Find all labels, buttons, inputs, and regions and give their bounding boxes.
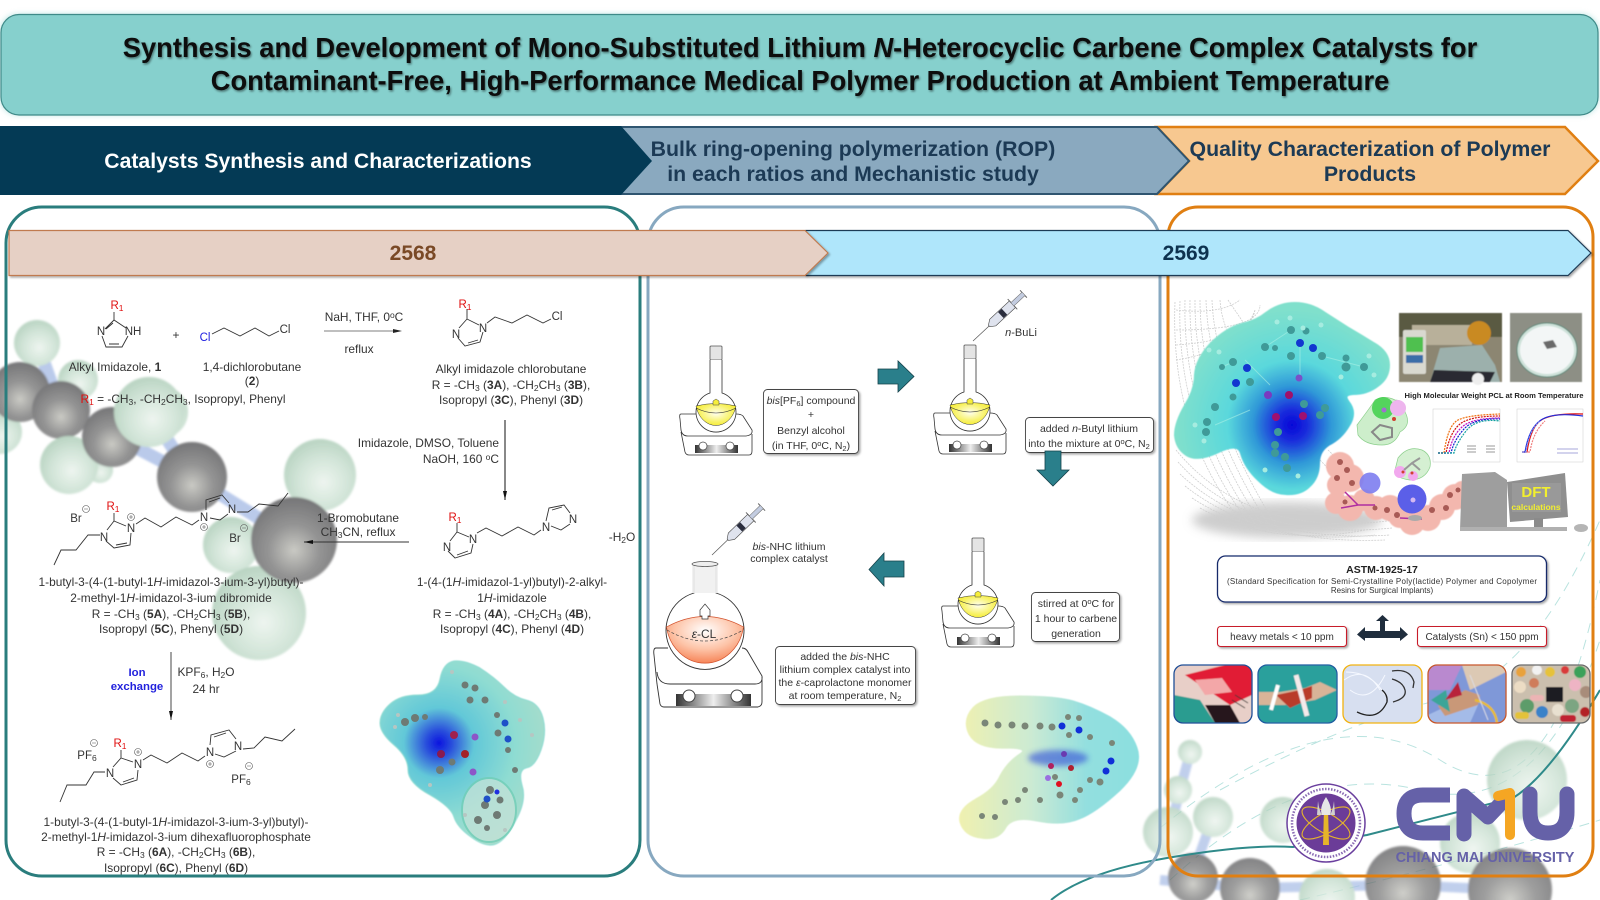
compound 3 caption: ( <box>561 378 568 392</box>
decorative teal swoosh line <box>1051 690 1600 900</box>
title banner <box>0 14 1599 115</box>
compound 4 caption: 1-(4-(1H-imidazol-1-yl)butyl)-2-alkyl- <box>417 575 607 589</box>
compound 5 caption: 1-butyl-3-(4-(1-butyl-1H-imidazol-3-ium-3-yl)butyl)- <box>39 575 304 589</box>
compound 5 caption: ( <box>140 607 147 621</box>
step 1 text box: (in THF, 0 <box>772 440 817 452</box>
compound 6 caption: CH <box>204 845 221 859</box>
reaction arrow 1: C <box>395 310 404 324</box>
structure: 4: N <box>542 522 550 534</box>
label: water loss: -H <box>609 530 621 544</box>
ASTM standard box: ASTM-1925-17 <box>1346 564 1418 576</box>
label: bis-NHC catalyst <box>750 541 828 565</box>
stage ribbon: bulk ROP: Bulk ring-opening polymerization (ROP) <box>651 137 1055 161</box>
structure: 3: Cl <box>552 311 562 323</box>
R1 substituents: 3 <box>183 397 188 407</box>
background: lower-right dashed curves and ball-and-stick molecule <box>1143 520 1600 900</box>
label: calculations: calculations <box>1511 502 1561 512</box>
compound 5 caption: ( <box>221 607 228 621</box>
compound 5 caption: 5A), -CH <box>147 607 194 621</box>
compound 4 caption: 1H-imidazole <box>477 591 547 605</box>
step 1 text box: C, N <box>821 440 842 452</box>
structure: 6: N <box>106 768 114 780</box>
compound 3 caption: Isopropyl (3C), Phenyl (3D) <box>439 393 583 407</box>
structure: dichlorobutane: Cl <box>280 324 290 336</box>
compound 5 caption: Isopropyl (5C), Phenyl (5D) <box>99 622 243 636</box>
step 1 text box: ) <box>847 440 850 452</box>
R1 substituents: , Isopropyl, Phenyl <box>188 392 285 406</box>
limit box: catalysts <box>1418 626 1546 646</box>
structure: 5: R <box>106 501 115 513</box>
stage ribbon: polymer characterization <box>1157 127 1598 194</box>
label: dichlorobutane: (2) <box>245 374 259 388</box>
structure: 3: 1 <box>467 302 472 312</box>
structure: alkyl imidazole: NH <box>125 326 141 338</box>
structure: 4: 1 <box>457 515 462 525</box>
structure: 4 <box>443 505 577 558</box>
panel: quality <box>1168 207 1593 876</box>
three-way arrow <box>1357 615 1408 641</box>
structure: alkyl imidazole <box>97 300 141 347</box>
structure: 6: 6 <box>246 777 251 787</box>
compound 6 caption: 3 <box>221 850 226 860</box>
compound 6 caption: Isopropyl (6C), Phenyl (6D) <box>104 861 248 875</box>
panel: synthesis <box>6 207 640 876</box>
stage ribbon: bulk ROP <box>600 127 1189 194</box>
structure: 3: N <box>479 323 487 335</box>
compound 5 caption: 3 <box>216 612 221 622</box>
reaction arrow 1: o <box>390 310 395 320</box>
timeline arrow: 2569 <box>806 230 1591 276</box>
step 1 text box: 6 <box>796 399 801 408</box>
structure: 6: 6 <box>92 753 97 763</box>
green NCI molecule 2 <box>1394 449 1430 481</box>
reaction arrow 4: ion exchange: 2 <box>221 670 226 680</box>
reaction arrow 4: ion exchange: 24 hr <box>192 682 220 696</box>
timeline arrow: 2568: 2568 <box>390 242 437 265</box>
reaction arrow 4: ion exchange <box>111 652 235 720</box>
structure: 6: N <box>134 759 142 771</box>
photo: surgical wound <box>1174 665 1252 723</box>
structure: 6: N <box>234 741 242 753</box>
step 1 text box: o <box>817 439 821 448</box>
compound 3 caption: Alkyl imidazole chlorobutane <box>436 362 587 376</box>
structure: 5: N <box>127 523 135 535</box>
compound 5 caption: 3 <box>135 612 140 622</box>
reaction arrow 2 <box>358 420 507 500</box>
step 4 text box: 2 <box>897 694 901 703</box>
panel: polymerization <box>648 207 1160 876</box>
chart: kinetics A <box>1433 409 1500 462</box>
step 3 text box: generation <box>1051 628 1101 640</box>
structure: 4: R <box>448 512 457 524</box>
stage ribbon: catalyst synthesis: Catalysts Synthesis and Characterizations <box>104 150 532 173</box>
step 1: flask on stirrer <box>680 346 752 455</box>
compound 5 caption: CH <box>199 607 216 621</box>
structure: 6: PF <box>77 750 92 762</box>
limit box: heavy metals: heavy metals < 10 ppm <box>1230 632 1334 643</box>
compound 4 caption: ( <box>562 607 569 621</box>
label: water loss: O <box>626 530 635 544</box>
R1 substituents: 2 <box>161 397 166 407</box>
reaction arrow 2: o <box>486 452 491 462</box>
structure: alkyl imidazole: R <box>110 300 119 312</box>
compound 5 caption: 5B), <box>228 607 250 621</box>
ESP molecule: middle panel <box>961 697 1138 838</box>
reaction arrow 4: ion exchange: O <box>225 665 235 679</box>
photo: suture needles <box>1343 665 1422 723</box>
label: DFT: DFT <box>1521 484 1551 501</box>
step 2 text box <box>1026 418 1154 452</box>
compound 5 caption: 2-methyl-1H-imidazol-3-ium dibromide <box>70 591 272 605</box>
structure: 3: R <box>458 299 467 311</box>
stage ribbon: polymer characterization: Products <box>1324 162 1416 186</box>
timeline arrow: 2568 <box>9 230 828 276</box>
structure: alkyl imidazole: N <box>97 326 105 338</box>
compound 3 caption: 3B), <box>568 378 590 392</box>
step 4 text box: the ε-caprolactone monomer <box>778 677 912 689</box>
reaction arrow 1: reflux <box>344 342 374 356</box>
compound 6 caption: 6B), <box>233 845 255 859</box>
logo: faculty seal <box>1287 784 1365 862</box>
reaction arrow 4: ion exchange: exchange <box>111 681 163 693</box>
compound 6 caption: R = -CH <box>97 845 140 859</box>
structure: 6: 1 <box>122 741 127 751</box>
compound 6 caption <box>41 815 311 875</box>
step 2 text box: C, N <box>1125 438 1146 450</box>
reaction arrow 2: C <box>490 452 499 466</box>
compound 6 caption: 2 <box>199 850 204 860</box>
compound 4 caption: CH <box>540 607 557 621</box>
caption: high molecular weight PCL: High Molecular Weight PCL at Room Temperature <box>1405 391 1583 400</box>
R1 substituents: 1 <box>89 397 94 407</box>
ESP molecule: right panel <box>1177 305 1387 492</box>
compound 4 caption: 4A), -CH <box>488 607 535 621</box>
compound 5 caption: 2 <box>194 612 199 622</box>
step 4 text box: at room temperature, N <box>789 690 897 702</box>
compound 6 caption: 1-butyl-3-(4-(1-butyl-1H-imidazol-3-ium-3-yl)butyl)- <box>44 815 309 829</box>
step 1 text box: bis[PF <box>767 395 796 407</box>
step 1 text box: ] compound <box>801 395 856 407</box>
scheme step 1: reagents: + <box>173 328 180 342</box>
label: dichlorobutane: 1,4-dichlorobutane <box>203 360 302 374</box>
reaction arrow 3: CH <box>321 525 338 539</box>
compound 3 caption: 3 <box>556 383 561 393</box>
chart: kinetics B <box>1517 409 1583 462</box>
step 3 text box: C for <box>1092 598 1115 610</box>
structure: 5: N <box>100 532 108 544</box>
compound 4 caption: ( <box>481 607 488 621</box>
reaction arrow 4: ion exchange: KPF <box>177 665 201 679</box>
step 3 text box: o <box>1087 597 1092 606</box>
R1 substituents: = -CH <box>94 392 129 406</box>
compound 6 caption: ( <box>145 845 152 859</box>
globe wireframe and shadow <box>1175 300 1395 540</box>
label: bis-NHC catalyst: complex catalyst <box>750 553 828 565</box>
step 2: syringe <box>968 289 1028 346</box>
step 4 text box <box>776 646 916 704</box>
ASTM standard box: (Standard Specification for Semi-Crystalline Poly(lactide) Polymer and Copolymer <box>1227 577 1537 586</box>
structure: 5: 1 <box>115 504 120 514</box>
ASTM standard box: Resins for Surgical Implants) <box>1331 586 1433 595</box>
reaction arrow 1: NaH, THF, 0 <box>325 310 390 324</box>
compound 3 caption: 2 <box>534 383 539 393</box>
label: dichlorobutane <box>203 360 302 388</box>
photo: polymerization setup <box>1399 313 1502 385</box>
structure: 4: N <box>443 542 451 554</box>
limit box: catalysts: Catalysts (Sn) < 150 ppm <box>1425 632 1539 643</box>
compound 3 caption: R = -CH <box>432 378 475 392</box>
step 4 text box: added the bis-NHC <box>800 651 890 663</box>
reaction arrow 4: ion exchange: , H <box>205 665 221 679</box>
structure: 6: R <box>113 738 122 750</box>
compound 3 caption <box>432 362 590 407</box>
step 2 text box: added n-Butyl lithium <box>1040 423 1138 435</box>
compound 4 caption: Isopropyl (4C), Phenyl (4D) <box>440 622 584 636</box>
photo: polymer powder <box>1510 313 1582 382</box>
computer: DFT calculations <box>1460 472 1588 532</box>
structure: 4: N <box>469 534 477 546</box>
compound 6 caption: 6A), -CH <box>152 845 199 859</box>
R1 substituents: R <box>81 392 94 407</box>
structure: 5: N <box>200 512 208 524</box>
compound 5 caption <box>39 575 304 636</box>
step 4 text box: lithium complex catalyst into <box>780 664 911 676</box>
structure: alkyl imidazole: 1 <box>119 303 124 313</box>
reaction arrow 4: ion exchange: 6 <box>201 670 206 680</box>
structure: 6: PF <box>231 774 246 786</box>
step 2 text box: into the mixture at 0 <box>1028 438 1120 450</box>
label: bis-NHC catalyst: bis-NHC lithium <box>753 541 826 553</box>
compound 5 caption: R = -CH <box>92 607 135 621</box>
structure: 3: N <box>452 329 460 341</box>
compound 4 caption: 4B), <box>569 607 591 621</box>
R1 substituents: CH <box>166 392 183 406</box>
compound 6 caption: ( <box>226 845 233 859</box>
arrow: step 1 to 2 <box>878 361 914 392</box>
compound 6 caption: 2-methyl-1H-imidazol-3-ium dihexafluorophosphate <box>41 830 311 844</box>
pink molecule with lithium spheres <box>1325 452 1471 535</box>
step 4: large flask on stirrer <box>654 562 762 707</box>
step 4: syringe <box>707 502 766 560</box>
reaction arrow 1 <box>324 310 404 356</box>
compound 6 caption: 3 <box>140 850 145 860</box>
ESP molecule: left panel <box>380 661 545 845</box>
step 2: flask on stirrer <box>934 345 1006 454</box>
compound 3 caption: 3 <box>475 383 480 393</box>
scheme step 1: reagents <box>69 300 302 407</box>
green NCI molecule 1 <box>1357 397 1408 445</box>
step 2 text box: o <box>1120 437 1125 446</box>
label: alkyl imidazole: Alkyl Imidazole, 1 <box>69 360 162 374</box>
reaction arrow 2: Imidazole, DMSO, Toluene <box>358 436 499 450</box>
reaction arrow 3: 3 <box>338 530 343 540</box>
label: water loss: 2 <box>621 535 626 545</box>
structure: 5: Br <box>70 513 82 525</box>
structure: dichlorobutane: Cl <box>200 332 210 344</box>
photo: pills <box>1512 665 1592 723</box>
structure: 5: Br <box>229 533 241 545</box>
label: n-BuLi: n-BuLi <box>1005 327 1037 339</box>
step 3 text box <box>1032 592 1120 642</box>
step 1 text box: + <box>808 409 814 421</box>
photo: patient hand <box>1428 665 1506 723</box>
stage ribbon: bulk ROP: in each ratios and Mechanistic study <box>667 162 1039 186</box>
R1 substituents: 3 <box>129 397 134 407</box>
structure: 6 <box>60 729 295 802</box>
timeline arrow: 2569: 2569 <box>1163 242 1209 265</box>
stage ribbon: catalyst synthesis <box>0 126 652 195</box>
step 1 text box: Benzyl alcohol <box>777 425 845 437</box>
structure: 6: N <box>206 747 214 759</box>
compound 3 caption: ( <box>480 378 487 392</box>
label: Chiang Mai University: CHIANG MAI UNIVERSITY <box>1396 850 1575 866</box>
structure: 3 <box>452 299 562 346</box>
structure: 5: N <box>228 504 236 516</box>
R1 substituents: , -CH <box>133 392 161 406</box>
step 1 text box: 2 <box>842 444 847 453</box>
compound 4 caption: R = -CH <box>433 607 476 621</box>
step 3 text box: stirred at 0 <box>1038 598 1087 610</box>
compound 4 caption: 3 <box>557 612 562 622</box>
step 3 text box: 1 hour to carbene <box>1035 613 1117 625</box>
reaction arrow 2: NaOH, 160 <box>423 452 482 466</box>
compound 4 caption <box>417 575 607 636</box>
compound 3 caption: 3A), -CH <box>487 378 534 392</box>
logo: CMU <box>1396 793 1575 866</box>
reaction arrow 3: CN, reflux <box>343 525 395 539</box>
compound 3 caption: CH <box>539 378 556 392</box>
compound 4 caption: 2 <box>535 612 540 622</box>
reaction arrow 3 <box>304 511 409 544</box>
compound 4 caption: 3 <box>476 612 481 622</box>
photo: hand graft <box>1258 665 1337 723</box>
background: left ball-and-stick molecule <box>0 320 356 660</box>
arrow: step 3 to 4 <box>869 553 904 586</box>
limit box: heavy metals <box>1218 626 1346 646</box>
stage ribbon: polymer characterization: Quality Characterization of Polymer <box>1190 137 1550 161</box>
step 3: flask on stirrer <box>942 538 1014 647</box>
title text <box>123 32 1478 96</box>
step 1 text box <box>764 390 858 454</box>
structure: 5 <box>54 493 288 565</box>
title text: Synthesis and Development of Mono-Substituted Lithium N-Heterocyclic Carbene Complex Catalysts for <box>123 32 1478 63</box>
reaction arrow 3: 1-Bromobutane <box>317 511 399 525</box>
label: epsilon-CL: ε-CL <box>692 627 717 641</box>
step 2 text box: 2 <box>1146 442 1150 451</box>
reaction arrow 4: ion exchange: Ion <box>128 667 146 679</box>
title text: Contaminant-Free, High-Performance Medical Polymer Production at Ambient Temperature <box>211 65 1389 96</box>
arrow: step 2 to 3 <box>1037 451 1069 486</box>
structure: dichlorobutane <box>200 324 290 344</box>
ASTM standard box <box>1218 556 1546 602</box>
structure: 4: N <box>569 514 577 526</box>
